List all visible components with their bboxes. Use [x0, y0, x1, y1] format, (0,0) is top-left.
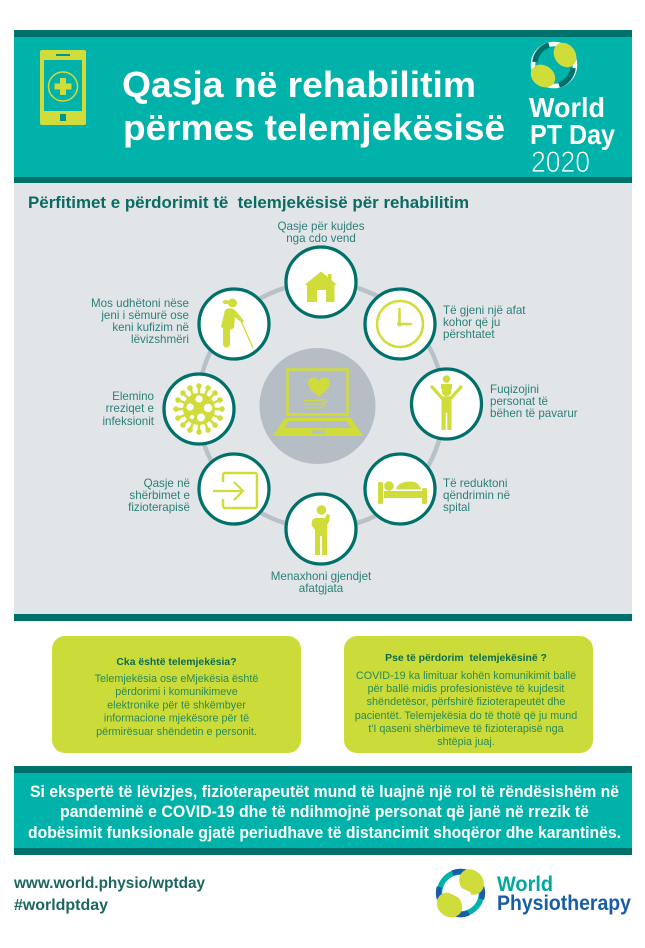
center circle with laptop icon: [260, 348, 376, 464]
callout: what is telehealth: informacione mjekësore për të: [104, 712, 249, 724]
callout: what is telehealth: Telemjekësia ose eMjekësia është: [95, 673, 258, 685]
item: enter access: Qasje në: [144, 477, 190, 490]
item: person with chronic condition: [271, 494, 372, 595]
item: enter access: shërbimet e: [129, 489, 190, 502]
item: elderly person with cane: lëvizshmëri: [131, 333, 189, 346]
heading: Përfitimet e përdorimit të telemjekësisë për rehabilitim: [28, 193, 469, 212]
item: virus: rreziqet e: [106, 402, 154, 415]
logo: World PT Day 2020: 2020: [531, 146, 590, 179]
callout: what is telehealth: Cka është telemjekësia?: [116, 657, 237, 668]
callout: why use telehealth: pacientët. Telemjekësia do të thotë që ju mund: [355, 710, 577, 722]
item: clock: kohor që ju: [443, 316, 500, 329]
title: përmes telemjekësisë: [123, 107, 505, 148]
item: person with chronic condition: afatgjata: [299, 582, 344, 595]
callout: why use telehealth: [344, 636, 593, 753]
item: child on shoulders: personat të: [490, 395, 548, 408]
item: hospital bed: qëndrimin në: [443, 489, 510, 502]
item: enter access: fizioterapisë: [128, 501, 190, 514]
icon: smartphone with medical cross: [40, 50, 86, 125]
item: elderly person with cane: jeni i sëmurë ose: [100, 309, 189, 322]
ring connecting circles: [198, 282, 444, 528]
item: child on shoulders: [412, 369, 578, 439]
item: hospital bed: [365, 454, 510, 524]
item: enter access: [128, 454, 269, 524]
logo: World PT Day 2020: PT Day: [530, 119, 615, 150]
callout: why use telehealth: shëndetësor, përfshirë fizioterapeutët dhe: [367, 696, 565, 708]
callout: what is telehealth: elektronike për të shkëmbyer: [107, 700, 246, 712]
callout: why use telehealth: shtëpia juaj.: [437, 736, 495, 748]
callout: why use telehealth: për ballë midis profesionistëve të kujdesit: [368, 683, 564, 695]
logo: World PT Day 2020: [526, 38, 615, 179]
logo: World Physiotherapy: [432, 864, 631, 922]
item: virus: infeksionit: [102, 415, 155, 428]
banner: physiotherapists' role: [14, 766, 632, 855]
callout: what is telehealth: përmirësuar shëndetin e personit.: [96, 726, 257, 738]
item: hospital bed: spital: [443, 501, 470, 514]
callout: why use telehealth: Pse të përdorim telemjekësinë ?: [385, 653, 547, 664]
footer links: [13, 875, 205, 914]
footer links: www.world.physio/wptday: [13, 875, 205, 892]
item: clock: Të gjeni një afat: [443, 304, 526, 317]
header banner: [14, 30, 632, 183]
banner: physiotherapists' role: Si ekspertë të lëvizjes, fizioterapeutët mund të luajnë një rol të rëndësishëm në: [30, 783, 619, 801]
item: child on shoulders: Fuqizojini: [490, 383, 539, 396]
item: elderly person with cane: Mos udhëtoni nëse: [91, 297, 189, 310]
title: Qasja në rehabilitim: [122, 64, 476, 105]
banner: physiotherapists' role: pandeminë e COVID-19 dhe të ndihmojnë personat që janë në rrezik të: [60, 803, 589, 821]
item: hospital bed: Të reduktoni: [443, 477, 507, 490]
item: virus: [102, 374, 234, 444]
logo: World Physiotherapy: Physiotherapy: [497, 892, 631, 915]
item: home: [278, 220, 365, 317]
item: elderly person with cane: keni kufizim në: [112, 321, 189, 334]
item: home: Qasje për kujdes: [278, 220, 365, 233]
title: [122, 64, 505, 148]
logo: World Physiotherapy: World: [497, 873, 553, 896]
item: elderly person with cane: [91, 289, 269, 359]
item: person with chronic condition: Menaxhoni gjendjet: [271, 570, 372, 583]
item: clock: [365, 289, 526, 359]
item: home: nga cdo vend: [286, 232, 356, 245]
callout: why use telehealth: t'I qaseni shërbimeve të fizioterapisë nga: [368, 723, 564, 735]
callout: why use telehealth: COVID-19 ka limituar kohën komunikimit ballë: [356, 670, 576, 682]
footer links: #worldptday: [14, 897, 108, 914]
item: clock: përshtatet: [443, 328, 495, 341]
banner: physiotherapists' role: dobësimit funksionale gjatë periudhave të distancimit shoqëror dhe karantinës.: [28, 824, 621, 842]
callout: what is telehealth: përdorimi i komunikimeve: [115, 686, 238, 698]
callout: what is telehealth: [52, 636, 301, 753]
logo: World PT Day 2020: World: [529, 92, 605, 123]
panel: benefits of telehealth: [14, 183, 632, 621]
item: virus: Elemino: [112, 390, 154, 403]
item: child on shoulders: bëhen të pavarur: [490, 407, 578, 420]
